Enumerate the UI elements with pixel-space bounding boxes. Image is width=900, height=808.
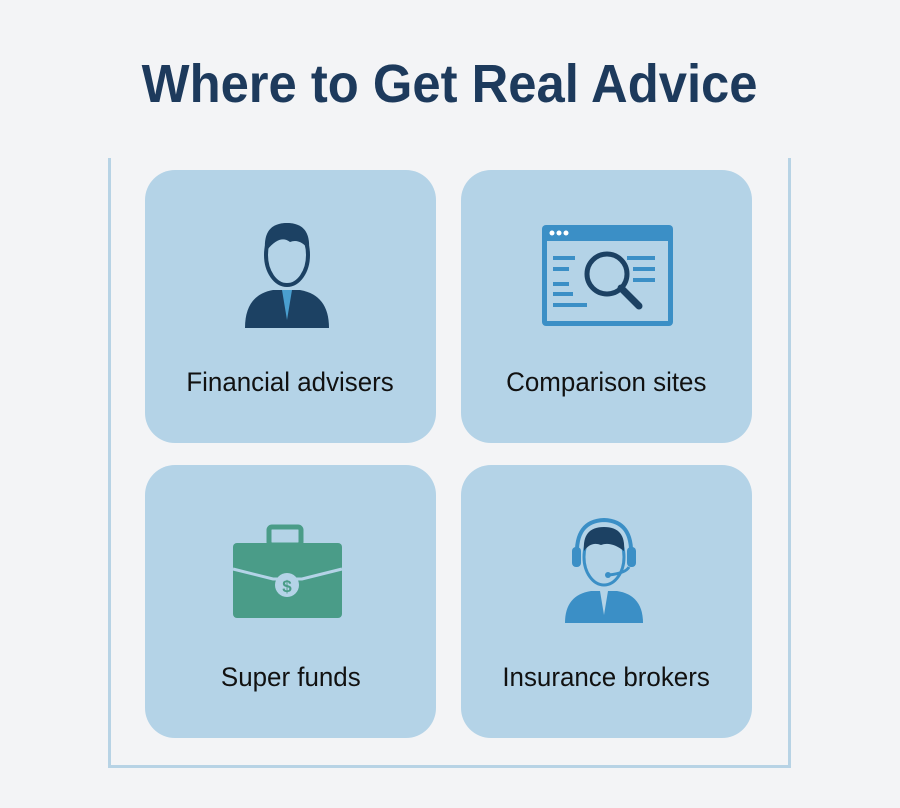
panel: comparison sites — [461, 170, 752, 443]
label: Comparison sites — [506, 367, 707, 397]
icon: person — [245, 223, 329, 328]
panel: financial advisers — [145, 170, 436, 443]
label: Super funds — [221, 662, 360, 692]
icon: headset person — [565, 518, 643, 623]
icon: browser with magnifier — [542, 225, 673, 326]
frame — [108, 158, 791, 768]
title: Where to Get Real Advice — [142, 54, 758, 114]
icon: briefcase — [233, 524, 342, 618]
panel: insurance brokers — [461, 465, 752, 738]
icon: briefcase: $ — [282, 577, 292, 596]
panel: super funds — [145, 465, 436, 738]
label: Insurance brokers — [503, 662, 710, 692]
label: Financial advisers — [187, 367, 394, 397]
